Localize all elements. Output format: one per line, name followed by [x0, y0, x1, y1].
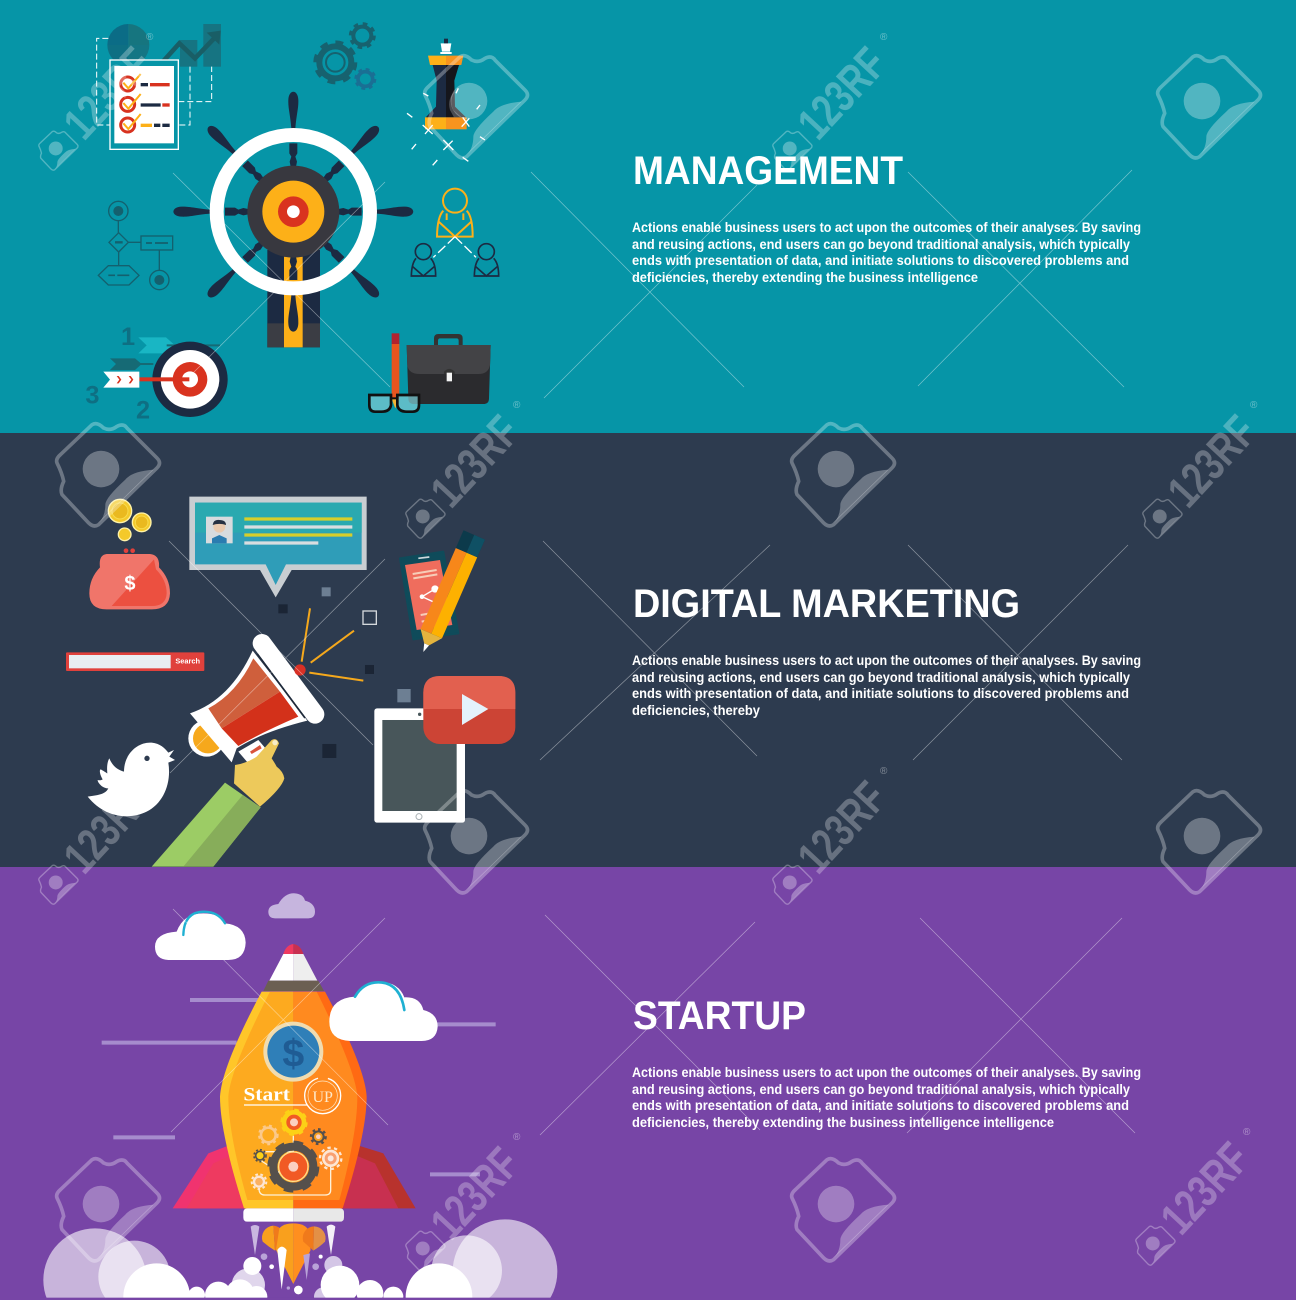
text block: startup description — [632, 1065, 1141, 1130]
rocket window with dollar: $ — [282, 1032, 304, 1076]
label: dollar sign: $ — [124, 573, 136, 595]
text block: management description: deficiencies, thereby extending the business intelligence — [632, 270, 978, 285]
label: Start: Start — [243, 1085, 291, 1106]
label: search button: Search — [175, 657, 201, 666]
text block: digital marketing description: ends with presentation of data, and initiate solutions to discovered problems and — [632, 686, 1129, 701]
text block: startup description: and reusing actions, end users can go beyond traditional analysis, which typically — [632, 1082, 1131, 1097]
icon: ship wheel — [173, 92, 413, 332]
watermark: 123RF text: ® — [513, 400, 521, 411]
heading: management: MANAGEMENT — [633, 149, 903, 193]
watermark: 123RF text: 123RF — [787, 771, 896, 883]
icon: flowchart — [98, 201, 173, 290]
icon: rocket flames — [251, 1223, 335, 1294]
text block: startup description: ends with presentation of data, and initiate solutions to discovered problems and — [632, 1098, 1129, 1113]
label: UP badge — [305, 1078, 341, 1114]
icon: megaphone — [188, 643, 315, 763]
text block: digital marketing description: and reusing actions, end users can go beyond traditional analysis, which typically — [632, 670, 1131, 685]
crossing lines over illustration — [171, 909, 388, 1132]
crossing lines over illustration — [173, 173, 390, 387]
icon: hand and sleeve — [152, 739, 284, 867]
icon: twitter bird — [88, 743, 175, 816]
icon: pencil — [413, 530, 485, 657]
icon: rocket fins — [173, 1145, 416, 1208]
heading: digital marketing: DIGITAL MARKETING — [633, 582, 1020, 626]
decorative squares — [278, 587, 411, 758]
heading: startup: STARTUP — [633, 994, 806, 1038]
label: number 3: 3 — [85, 381, 99, 409]
label: number 1: 1 — [121, 323, 135, 351]
search bar — [66, 652, 204, 671]
icon: checklist — [110, 60, 178, 149]
smoke clouds — [43, 1219, 557, 1300]
icon: sound rays — [302, 608, 363, 681]
text block: startup description: Actions enable business users to act upon the outcomes of their analyses. By saving — [632, 1065, 1141, 1080]
text block: management description: ends with presentation of data, and initiate solutions to discovered problems and — [632, 253, 1129, 268]
panel: digital marketing — [0, 433, 1296, 867]
icon: gears — [316, 24, 375, 89]
icon: rocket gears — [252, 1110, 341, 1195]
icon: chess piece — [407, 39, 485, 165]
label: number 2: 2 — [136, 396, 150, 424]
watermark: 123RF text: 123RF — [420, 1137, 529, 1249]
speech bubble with profile — [189, 497, 367, 597]
icon: coins — [108, 499, 151, 541]
label: UP badge: UP — [312, 1089, 333, 1106]
icon: purse — [89, 548, 170, 609]
icon: rocket body — [220, 944, 367, 1222]
watermark: 123RF text: ® — [1250, 400, 1258, 411]
icon: tablet — [374, 708, 465, 823]
watermark: 123RF text: ® — [1243, 1127, 1251, 1138]
watermark: 123RF text: ® — [146, 766, 154, 777]
watermark: 123RF text: 123RF — [787, 37, 896, 149]
watermark: 123RF text: 123RF — [53, 771, 162, 883]
icon: left white cloud — [155, 912, 246, 960]
icon: right white cloud — [329, 982, 438, 1041]
watermark: 123RF text: 123RF — [1157, 405, 1266, 517]
illustration: management icons — [85, 24, 499, 424]
crossing lines over illustration — [169, 541, 385, 773]
icon: video play button — [423, 676, 515, 744]
rocket base — [243, 1208, 344, 1222]
text block: digital marketing description: deficiencies, thereby — [632, 703, 761, 718]
icon: smartphone — [400, 552, 458, 639]
watermark: 123RF text: 123RF — [53, 37, 162, 149]
text block: management description — [632, 220, 1141, 285]
watermark: 123RF text: ® — [513, 1132, 521, 1143]
rocket window with dollar — [263, 1022, 323, 1082]
text block: management description: Actions enable business users to act upon the outcomes of their analyses. By saving — [632, 220, 1141, 235]
text block: management description: and reusing actions, end users can go beyond traditional analysis, which typically — [632, 237, 1131, 252]
panel: management — [0, 0, 1296, 433]
watermark: 123RF text: 123RF — [1150, 1132, 1259, 1244]
icon: small lilac cloud — [268, 893, 315, 918]
watermark: 123RF text: 123RF — [420, 405, 529, 517]
panel: startup — [0, 867, 1296, 1300]
pedestal of ship wheel — [267, 250, 320, 347]
illustration: rocket launch — [40, 893, 560, 1300]
illustration: digital marketing icons — [66, 497, 515, 867]
icon: briefcase, pencil and glasses — [369, 333, 491, 412]
bottom strip — [40, 1298, 560, 1300]
watermark: small egg logos — [39, 131, 1182, 1270]
text block: digital marketing description: Actions enable business users to act upon the outcomes of their analyses. By saving — [632, 653, 1141, 668]
watermark: 123RF text: ® — [880, 32, 888, 43]
speed lines — [102, 1000, 496, 1174]
text block: startup description: deficiencies, thereby extending the business intelligence intelligence — [632, 1115, 1054, 1130]
icon: target with arrows — [85, 323, 228, 424]
watermark: 123RF text: ® — [880, 766, 888, 777]
watermark: 123RF text: ® — [146, 32, 154, 43]
icon: pie chart and growth bars — [97, 24, 221, 125]
text block: digital marketing description — [632, 653, 1141, 718]
icon: people hierarchy — [411, 189, 499, 276]
